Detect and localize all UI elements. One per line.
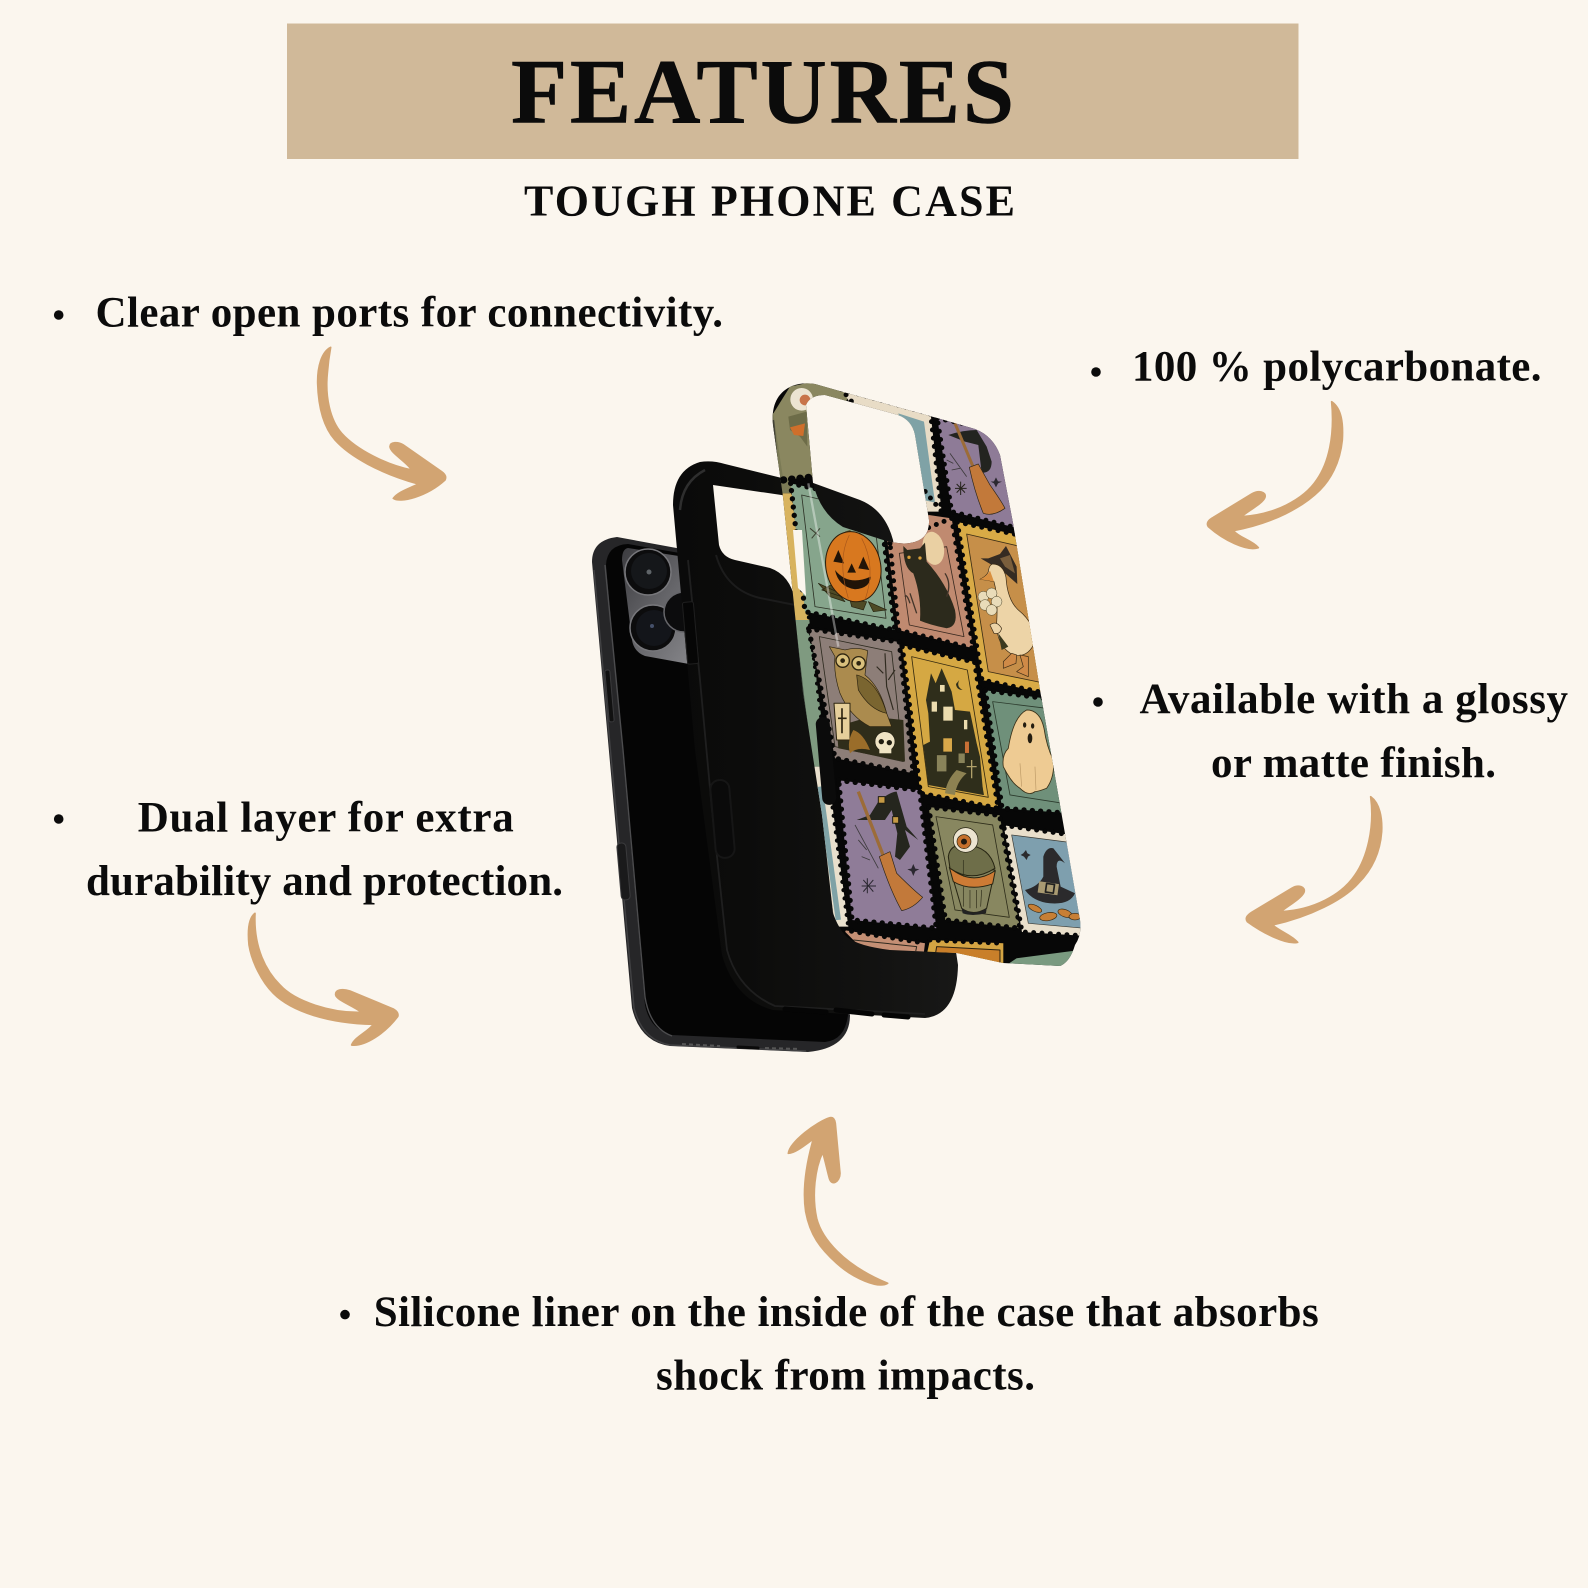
stamp: goose bbox=[957, 522, 1047, 693]
camera plateau bbox=[622, 548, 700, 666]
feature: silicone liner bbox=[340, 1289, 1319, 1400]
stamp: haunted house bbox=[902, 645, 998, 808]
inner side button bbox=[815, 717, 837, 805]
arrow: dual layer bbox=[248, 913, 398, 1045]
stamp: olive top-left bbox=[773, 382, 850, 480]
arrow: polycarbonate bbox=[1207, 402, 1343, 548]
lens 2 bbox=[630, 605, 676, 651]
middle case bbox=[673, 461, 958, 1018]
feature: dual layer bbox=[54, 794, 563, 905]
stamp: blue top-middle bbox=[842, 389, 942, 512]
stamp: pumpkin bbox=[791, 483, 895, 630]
lens 1 bbox=[625, 549, 671, 595]
stamp: owl bbox=[809, 629, 913, 773]
illustration: cupcake bbox=[950, 868, 995, 912]
feature: glossy or matte finish bbox=[1093, 676, 1568, 787]
back phone bbox=[592, 537, 850, 1052]
phone and case illustration bbox=[592, 370, 1090, 1052]
illustration: boot and broom bbox=[857, 792, 918, 860]
stamp: witch hat bbox=[1004, 825, 1087, 936]
stamp: bottom row bbox=[843, 930, 1080, 968]
feature: silicone liner: Silicone liner on the inside of the case that absorbs bbox=[374, 1289, 1319, 1336]
stamp: lavender broom bbox=[937, 418, 1018, 528]
stamp: black cat bbox=[883, 508, 973, 648]
title banner bbox=[287, 24, 1298, 159]
arrow: silicone liner bbox=[788, 1118, 888, 1285]
feature: dual layer: durability and protection. bbox=[86, 858, 563, 905]
illustrations: lower stamps bbox=[855, 710, 1081, 922]
feature: glossy or matte finish: or matte finish. bbox=[1211, 740, 1496, 787]
feature: dual layer: Dual layer for extra bbox=[138, 794, 514, 842]
lens 3 bbox=[664, 592, 704, 632]
stamp tiles bbox=[772, 382, 1087, 968]
gloss highlight bbox=[808, 483, 838, 647]
patterned front case bbox=[772, 383, 1080, 966]
case side wall bbox=[772, 413, 848, 927]
arrow: finish bbox=[1246, 797, 1382, 943]
side button cut-out bbox=[793, 530, 806, 596]
stamp: boot and broom bbox=[839, 780, 936, 928]
subtitle: TOUGH PHONE CASE bbox=[524, 176, 1015, 226]
stamp: ghost bbox=[986, 690, 1062, 813]
arrow: clear open ports bbox=[318, 347, 446, 500]
illustration: witch hat bbox=[1025, 848, 1075, 903]
feature: glossy or matte finish: Available with a glossy bbox=[1140, 676, 1568, 723]
feature: clear open ports: Clear open ports for connectivity. bbox=[96, 290, 723, 336]
stamp: cupcake bbox=[929, 807, 1020, 928]
heading: FEATURES: FEATURES bbox=[511, 41, 1014, 143]
feature: silicone liner: shock from impacts. bbox=[656, 1352, 1035, 1400]
feature: polycarbonate: 100 % polycarbonate. bbox=[1132, 344, 1542, 390]
illustration: ghost bbox=[1003, 710, 1054, 794]
